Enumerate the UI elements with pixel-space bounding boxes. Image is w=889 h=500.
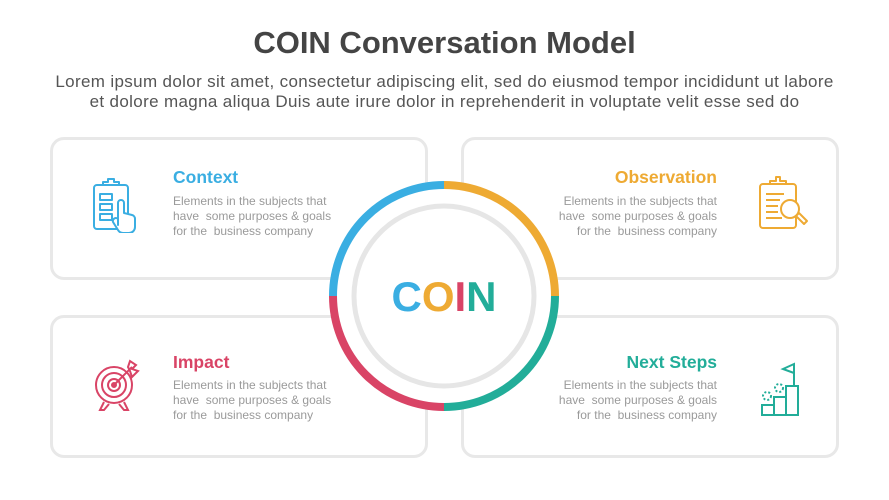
ring segment: orange bbox=[444, 185, 555, 296]
COIN label: COIN bbox=[391, 273, 497, 320]
circle diagram bbox=[329, 181, 559, 411]
icon: clipboard magnifier bbox=[759, 176, 808, 229]
text: context: for the business company bbox=[173, 224, 313, 238]
text: impact: for the business company bbox=[173, 408, 313, 422]
text: context bbox=[173, 194, 331, 238]
icon: clipboard hand bbox=[93, 178, 136, 233]
panel: impact bbox=[50, 315, 428, 458]
subtitle: et dolore magna aliqua Duis aute irure dolor in reprehenderit in voluptate velit esse sed do bbox=[90, 92, 799, 110]
ring segment: blue bbox=[333, 185, 444, 296]
ring segment: teal bbox=[444, 296, 555, 407]
text: impact: Elements in the subjects that bbox=[173, 378, 326, 392]
text: context: have some purposes & goals bbox=[173, 209, 331, 223]
title: COIN Conversation Model bbox=[253, 25, 636, 60]
subtitle bbox=[55, 72, 834, 110]
heading: observation: Observation bbox=[615, 167, 717, 187]
text: impact bbox=[173, 378, 331, 422]
heading: context: Context bbox=[173, 167, 238, 187]
ring segment: red bbox=[333, 296, 444, 407]
subtitle: Lorem ipsum dolor sit amet, consectetur adipiscing elit, sed do eiusmod tempor incididunt ut labore bbox=[55, 72, 834, 91]
panel: next steps bbox=[461, 315, 839, 458]
icon: target bbox=[95, 360, 140, 411]
inner ring bbox=[354, 206, 534, 386]
text: observation: for the business company bbox=[577, 224, 717, 238]
text: observation bbox=[559, 194, 717, 238]
text: next steps: have some purposes & goals bbox=[559, 393, 717, 407]
heading: next steps: Next Steps bbox=[627, 352, 717, 372]
text: observation: have some purposes & goals bbox=[559, 209, 717, 223]
heading: impact: Impact bbox=[173, 352, 229, 372]
panel: context bbox=[50, 137, 428, 280]
icon: steps flag bbox=[761, 362, 799, 416]
panel: observation bbox=[461, 137, 839, 280]
text: impact: have some purposes & goals bbox=[173, 393, 331, 407]
text: observation: Elements in the subjects that bbox=[564, 194, 717, 208]
text: next steps: Elements in the subjects that bbox=[564, 378, 717, 392]
text: context: Elements in the subjects that bbox=[173, 194, 326, 208]
text: next steps bbox=[559, 378, 717, 422]
text: next steps: for the business company bbox=[577, 408, 717, 422]
